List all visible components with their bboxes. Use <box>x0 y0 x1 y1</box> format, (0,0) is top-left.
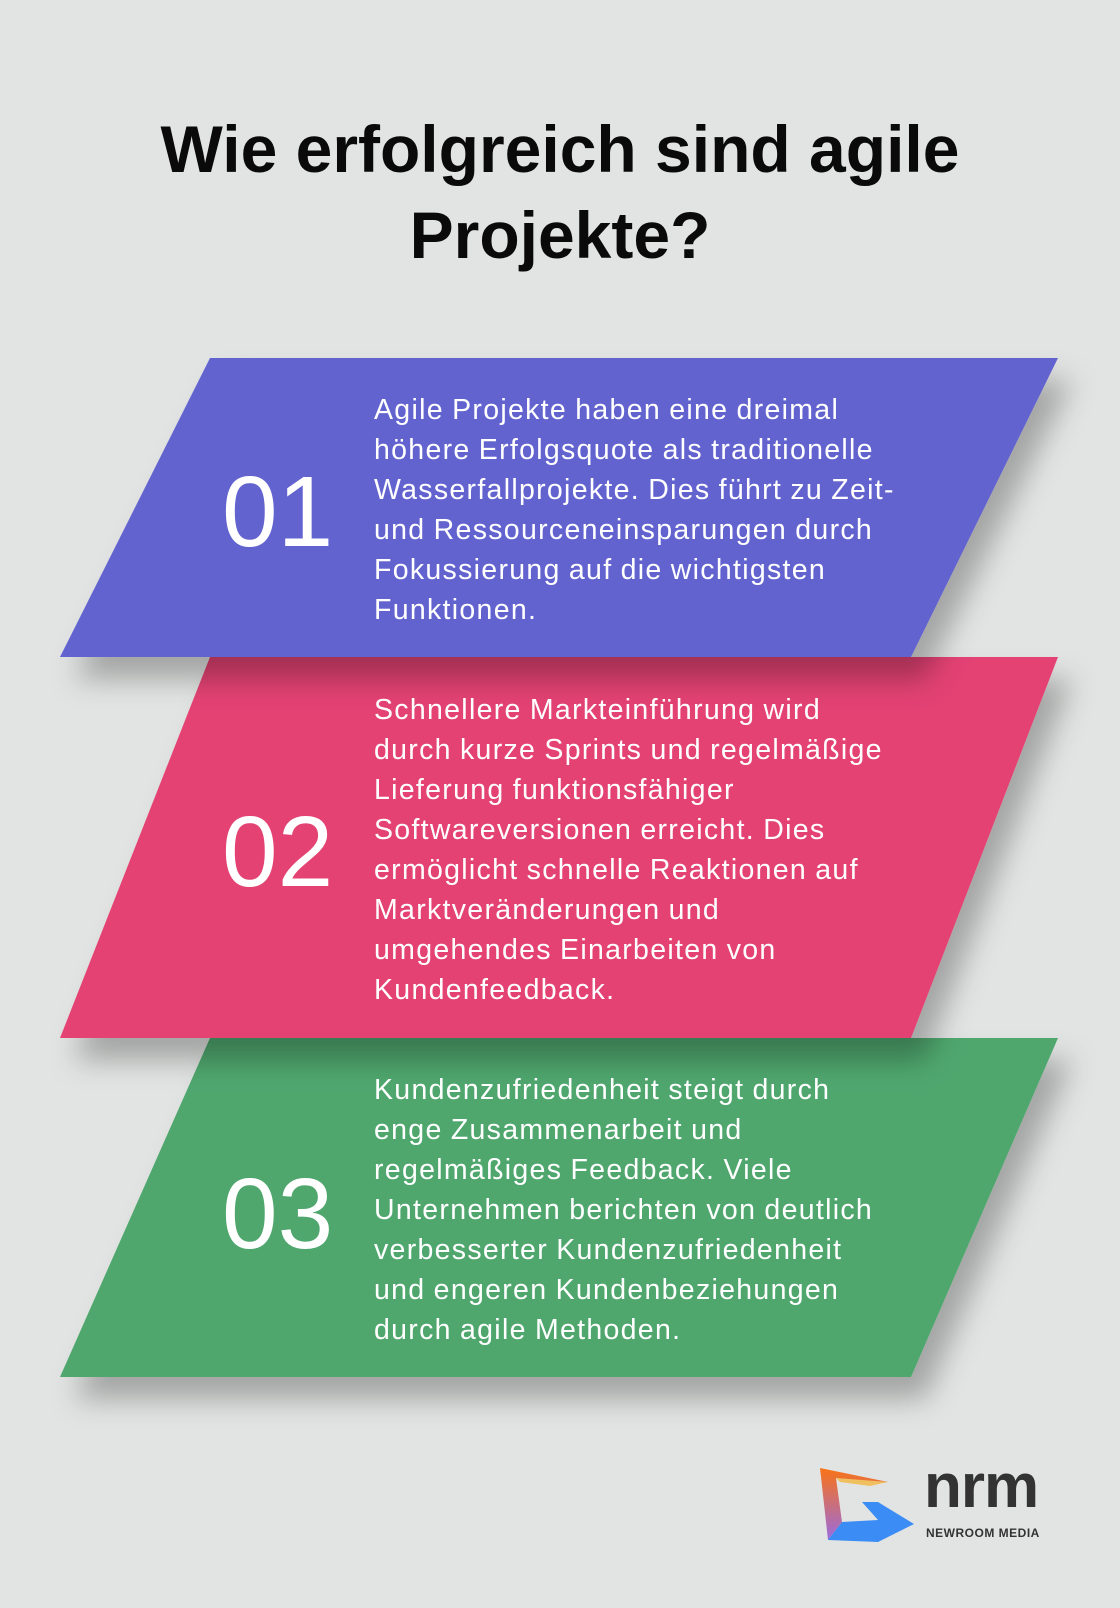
panel 3 number: 03 <box>222 1158 333 1270</box>
panel 2 text: umgehendes Einarbeiten von <box>374 934 777 966</box>
panel 1 text: Fokussierung auf die wichtigsten <box>374 554 826 586</box>
title <box>160 112 959 272</box>
panel 1 text: und Ressourceneinsparungen durch <box>374 514 873 546</box>
panel 1 text: Wasserfallprojekte. Dies führt zu Zeit- <box>374 474 895 506</box>
panel 2 text: ermöglicht schnelle Reaktionen auf <box>374 854 859 886</box>
panel 2 shape <box>60 657 1058 1038</box>
panel 2 text: Lieferung funktionsfähiger <box>374 774 735 806</box>
panel 2 number: 02 <box>222 796 333 908</box>
panel 3 text: und engeren Kundenbeziehungen <box>374 1274 839 1306</box>
logo: NEWROOM MEDIA <box>926 1526 1040 1540</box>
panel 2 text: Softwareversionen erreicht. Dies <box>374 814 825 846</box>
panel 2 text: durch kurze Sprints und regelmäßige <box>374 734 883 766</box>
title: Projekte? <box>410 198 710 272</box>
panel 1 text: Funktionen. <box>374 594 537 626</box>
panel 3 text: Unternehmen berichten von deutlich <box>374 1194 873 1226</box>
logo <box>820 1452 1040 1542</box>
panel 2 text <box>374 694 883 1006</box>
panel 3 text: verbesserter Kundenzufriedenheit <box>374 1234 842 1266</box>
panel 3 text <box>374 1074 873 1346</box>
panel 2 text: Schnellere Markteinführung wird <box>374 694 821 726</box>
panel 3 text: Kundenzufriedenheit steigt durch <box>374 1074 830 1106</box>
panel 2 text: Marktveränderungen und <box>374 894 720 926</box>
panel 3 text: regelmäßiges Feedback. Viele <box>374 1154 793 1186</box>
panel 1 shape <box>60 358 1058 657</box>
icon: logo mark <box>820 1468 914 1542</box>
logo wordmark: nrm <box>924 1452 1038 1521</box>
panel 1 text <box>374 394 895 626</box>
panel 3 text: enge Zusammenarbeit und <box>374 1114 743 1146</box>
panel 3 shape <box>60 1038 1058 1377</box>
panel 3 text: durch agile Methoden. <box>374 1314 681 1346</box>
panel 1 text: Agile Projekte haben eine dreimal <box>374 394 839 426</box>
panel 2 text: Kundenfeedback. <box>374 974 615 1006</box>
title: Wie erfolgreich sind agile <box>161 112 959 186</box>
panel 1 number: 01 <box>222 456 333 568</box>
panel 1 text: höhere Erfolgsquote als traditionelle <box>374 434 874 466</box>
